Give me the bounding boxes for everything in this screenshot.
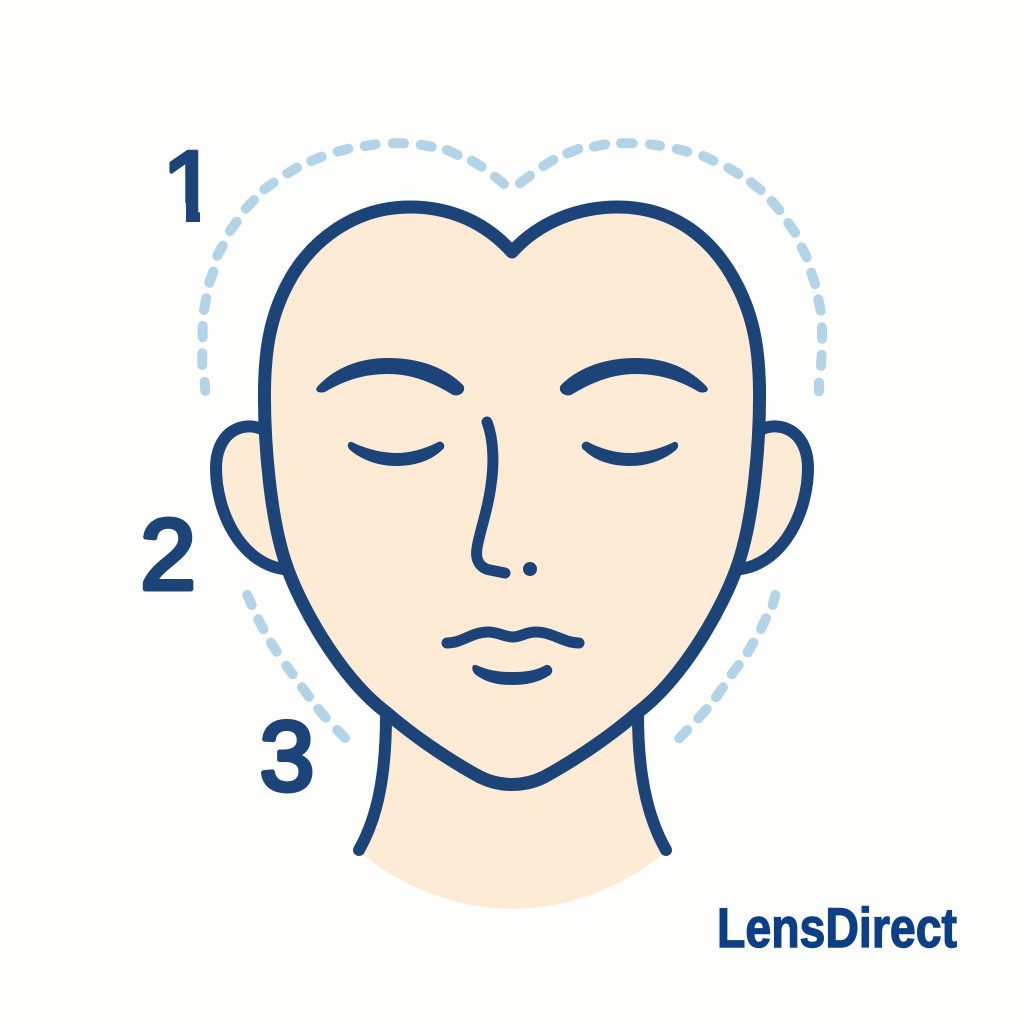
nose [477,422,537,576]
logo: LensDirect: LensDirect [717,896,957,959]
right eyebrow [560,358,708,395]
neck [358,700,667,909]
number 1: 1 [162,130,218,244]
number 2: 2 [140,499,196,611]
left ear [216,426,283,569]
dashed heart guide top [202,143,822,391]
face outline [264,207,760,784]
dashed guide lower right [679,595,775,738]
dashed guide lower left [247,595,345,738]
right ear [741,426,808,569]
number 3: 3 [260,701,314,811]
mouth [447,632,579,685]
left eyebrow [316,358,464,395]
left eye [348,442,444,466]
heart-shaped face diagram [142,138,957,948]
right eye [582,442,678,466]
